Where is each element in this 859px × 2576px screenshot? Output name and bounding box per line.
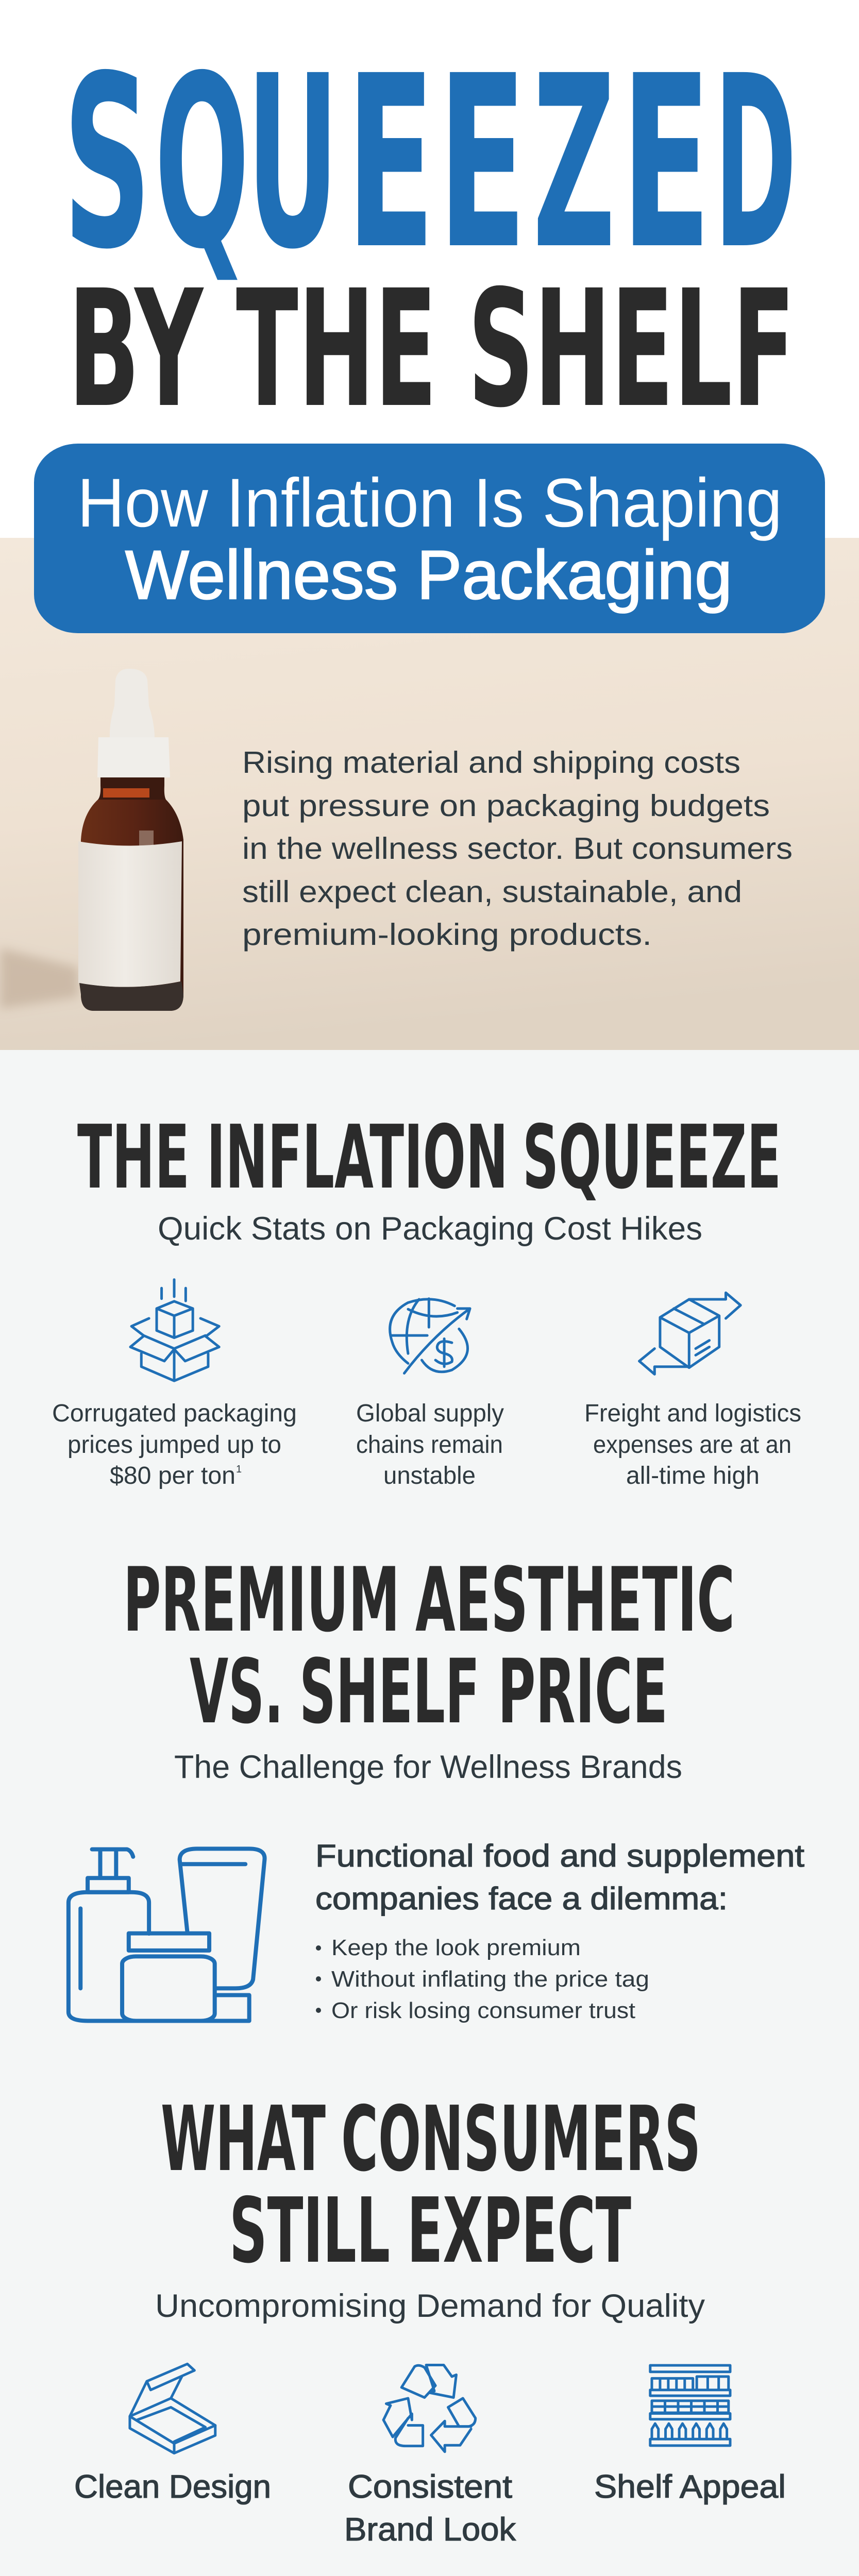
stat: global supply: chains remain (356, 1431, 503, 1459)
stat: freight and logistics: Freight and logistics (584, 1400, 801, 1427)
icon: box with arrows (639, 1293, 740, 1374)
subtitle banner: Wellness Packaging (125, 537, 732, 614)
icon: globe with dollar (390, 1299, 470, 1373)
stat: corrugated packaging: $80 per ton (110, 1462, 235, 1489)
title: squeezed: Z (533, 25, 615, 301)
label: consistent brand look: Consistent (348, 2469, 513, 2505)
subheading: the challenge: The Challenge for Wellness Brands (174, 1749, 682, 1785)
label: consistent brand look: Brand Look (344, 2512, 516, 2548)
stat: corrugated packaging: 1 (236, 1464, 242, 1475)
panel: light content section (0, 1050, 859, 2576)
text block: intro: premium-looking products. (242, 918, 652, 952)
subtitle banner (34, 444, 825, 633)
heading: premium aesthetic vs shelf price (123, 1548, 735, 1743)
stat: global supply: unstable (383, 1462, 476, 1489)
icon: store shelf (650, 2365, 730, 2446)
panel: hero background with bottle (0, 538, 859, 1050)
label: clean design: Clean Design (74, 2469, 271, 2505)
text block: intro: still expect clean, sustainable, and (242, 875, 742, 909)
title: by the shelf (68, 255, 795, 443)
text block: intro: in the wellness sector. But consumers (242, 832, 793, 866)
heading: premium aesthetic vs shelf price: PRICE (498, 1640, 668, 1743)
stat: freight and logistics (584, 1400, 801, 1489)
icon: open box (130, 2364, 215, 2453)
title: by the shelf: BY (68, 255, 204, 443)
icon: cosmetic bottles (69, 1849, 265, 2021)
stat: corrugated packaging: prices jumped up to (68, 1431, 281, 1459)
heading: what consumers still expect: STILL (229, 2179, 390, 2283)
text block: intro (242, 745, 793, 952)
stat: corrugated packaging: Corrugated packaging (52, 1400, 297, 1427)
heading: premium aesthetic vs shelf price: SHELF (299, 1640, 480, 1743)
title: squeezed (63, 25, 797, 301)
label: consistent brand look (344, 2469, 516, 2548)
heading: the inflation squeeze: THE (77, 1107, 190, 1209)
text block: dilemma: Functional food and supplement (315, 1838, 804, 1873)
text block: dilemma: Keep the look premium (331, 1935, 581, 1960)
title: squeezed: S (63, 25, 151, 301)
title: squeezed: E (438, 25, 527, 301)
title: by the shelf: THE (236, 255, 437, 443)
heading: what consumers still expect (161, 2087, 701, 2283)
text block: intro: put pressure on packaging budgets (242, 789, 770, 823)
text block: dilemma: Without inflating the price tag (331, 1967, 649, 1992)
text block: dilemma: companies face a dilemma: (315, 1881, 728, 1916)
title: squeezed: E (621, 25, 711, 301)
stat: global supply: Global supply (356, 1400, 504, 1427)
subheading: uncompromising demand: Uncompromising Demand for Quality (155, 2288, 705, 2324)
title: squeezed: E (346, 25, 435, 301)
heading: the inflation squeeze: INFLATION (207, 1107, 508, 1209)
text block: intro: Rising material and shipping costs (242, 745, 740, 779)
title: squeezed: U (246, 25, 339, 301)
label: shelf appeal: Shelf Appeal (594, 2469, 786, 2505)
subheading: quick stats: Quick Stats on Packaging Cost Hikes (158, 1211, 702, 1247)
heading: what consumers still expect: WHAT (161, 2087, 326, 2192)
stat: corrugated packaging (52, 1400, 297, 1489)
heading: premium aesthetic vs shelf price: PREMIUM (123, 1548, 400, 1652)
heading: premium aesthetic vs shelf price: VS. (190, 1640, 283, 1743)
icon: dropper bottle (0, 669, 183, 1011)
stat: freight and logistics: all-time high (626, 1462, 760, 1489)
heading: what consumers still expect: EXPECT (407, 2179, 631, 2283)
stat: freight and logistics: expenses are at an (593, 1431, 791, 1459)
text block: dilemma (315, 1838, 804, 2023)
stat: global supply (356, 1400, 504, 1489)
text block: dilemma: Or risk losing consumer trust (331, 1998, 635, 2023)
title: squeezed: Q (155, 25, 249, 301)
subtitle banner: How Inflation Is Shaping (77, 465, 782, 541)
icon: recycle arrows (383, 2365, 476, 2452)
icon: box with cube (130, 1280, 219, 1381)
